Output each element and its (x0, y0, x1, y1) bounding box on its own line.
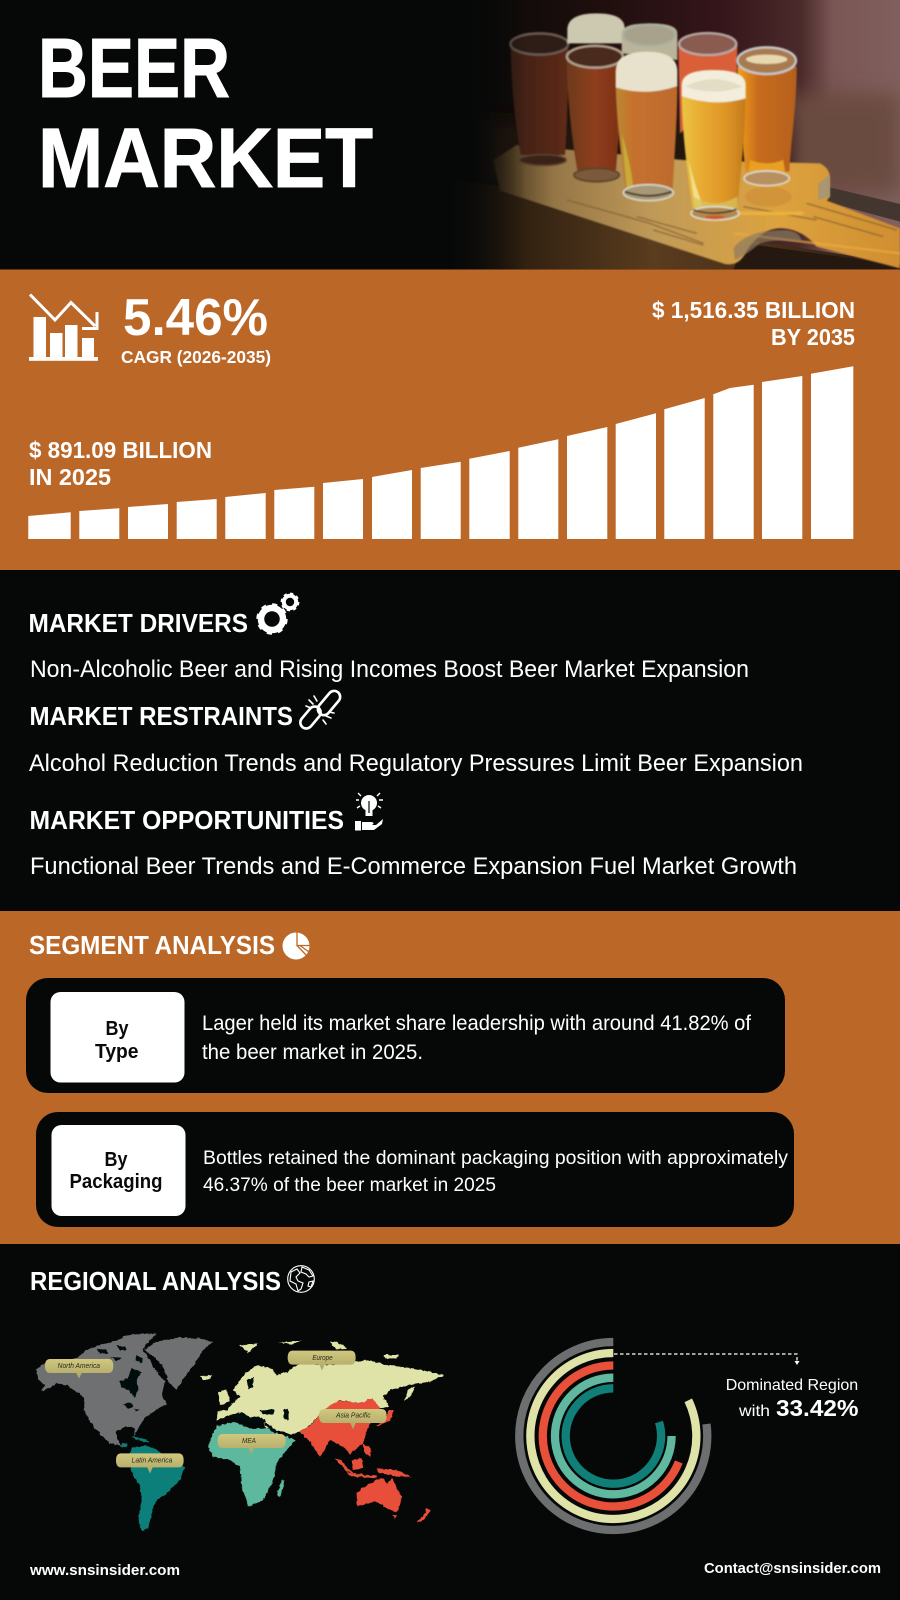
stat: CAGR: 5.46% (123, 289, 268, 347)
card: by type: By (106, 1017, 129, 1040)
panel: market size band (0, 270, 900, 570)
heading: regional analysis: REGIONAL ANALYSIS (30, 1266, 281, 1296)
text: restraint: Alcohol Reduction Trends and Regulatory Pressures Limit Beer Expansion (29, 750, 803, 777)
card: by type: the beer market in 2025. (202, 1041, 423, 1064)
stat: 2025 value: IN 2025 (29, 464, 111, 490)
title (38, 21, 373, 205)
icon: pie chart (282, 932, 310, 960)
label: North America: North America (58, 1363, 100, 1370)
card: by packaging: Bottles retained the dominant packaging position with approximately (203, 1147, 788, 1169)
card: by packaging (36, 1112, 794, 1227)
callout: dominated region: 33.42% (776, 1395, 859, 1421)
panel: market dynamics (28, 594, 803, 880)
mid glass (616, 52, 677, 201)
bar chart: market growth (28, 366, 853, 539)
title: MARKET (38, 111, 373, 205)
heading: segment analysis: SEGMENT ANALYSIS (29, 930, 275, 960)
heading: market opportunities: MARKET OPPORTUNITIES (30, 805, 344, 835)
radial bar chart: regional share (519, 1342, 707, 1530)
stat: 2025 value: $ 891.09 BILLION (29, 437, 212, 463)
lakes and bays (97, 1345, 143, 1412)
front lager glass (682, 70, 746, 220)
icon: globe (288, 1266, 314, 1292)
callout: dominated region (614, 1354, 859, 1421)
callout: dominated region: with (738, 1403, 770, 1420)
card: by type: Type (95, 1040, 138, 1063)
card: by packaging: Packaging (70, 1170, 162, 1193)
text: driver: Non-Alcoholic Beer and Rising Incomes Boost Beer Market Expansion (30, 656, 749, 683)
photo: beer flight on a wooden paddle (450, 0, 900, 270)
label: North America (45, 1359, 113, 1379)
icon: idea in hand (355, 793, 383, 830)
heading: market restraints: MARKET RESTRAINTS (30, 701, 293, 731)
back glasses (510, 13, 737, 182)
region: Europe and North Asia (200, 1341, 444, 1435)
card: by packaging: By (104, 1148, 128, 1171)
heading: market drivers: MARKET DRIVERS (28, 608, 248, 638)
stat: CAGR: CAGR (2026-2035) (121, 347, 271, 367)
region: Latin America (122, 1436, 185, 1531)
label: Asia Pacific: Asia Pacific (335, 1413, 371, 1420)
region: North America (36, 1333, 213, 1446)
footer: contact: Contact@snsinsider.com (704, 1561, 881, 1577)
label: Europe (288, 1351, 356, 1371)
callout: dominated region: Dominated Region (726, 1377, 858, 1394)
icon: gears (258, 594, 298, 633)
label: MEA (218, 1434, 286, 1454)
panel: segment analysis (0, 911, 900, 1244)
card: by type: Lager held its market share leadership with around 41.82% of (202, 1012, 751, 1035)
region: Middle East and Africa (208, 1422, 296, 1507)
label: Latin America: Latin America (132, 1458, 172, 1465)
stat: 2025 value (29, 437, 212, 490)
label: Europe: Europe (312, 1355, 333, 1362)
text: opportunity: Functional Beer Trends and E-Commerce Expansion Fuel Market Growth (30, 853, 797, 880)
stat: 2035 value (652, 297, 855, 350)
region: Asia Pacific (299, 1398, 431, 1522)
card: by packaging: 46.37% of the beer market in 2025 (203, 1174, 496, 1196)
stat: 2035 value: $ 1,516.35 BILLION (652, 297, 855, 323)
world map (36, 1333, 444, 1531)
label: MEA: MEA (242, 1438, 256, 1445)
stat: 2035 value: BY 2035 (771, 324, 855, 350)
footer: website: www.snsinsider.com (29, 1563, 180, 1579)
card: by type (26, 978, 785, 1093)
right amber glass (737, 47, 797, 207)
title: BEER (38, 21, 230, 115)
inland seas (230, 1377, 289, 1433)
label: Latin America (116, 1453, 184, 1474)
icon: broken chain (298, 688, 343, 731)
label: Asia Pacific (319, 1409, 387, 1429)
icon: falling bar chart (29, 294, 98, 361)
